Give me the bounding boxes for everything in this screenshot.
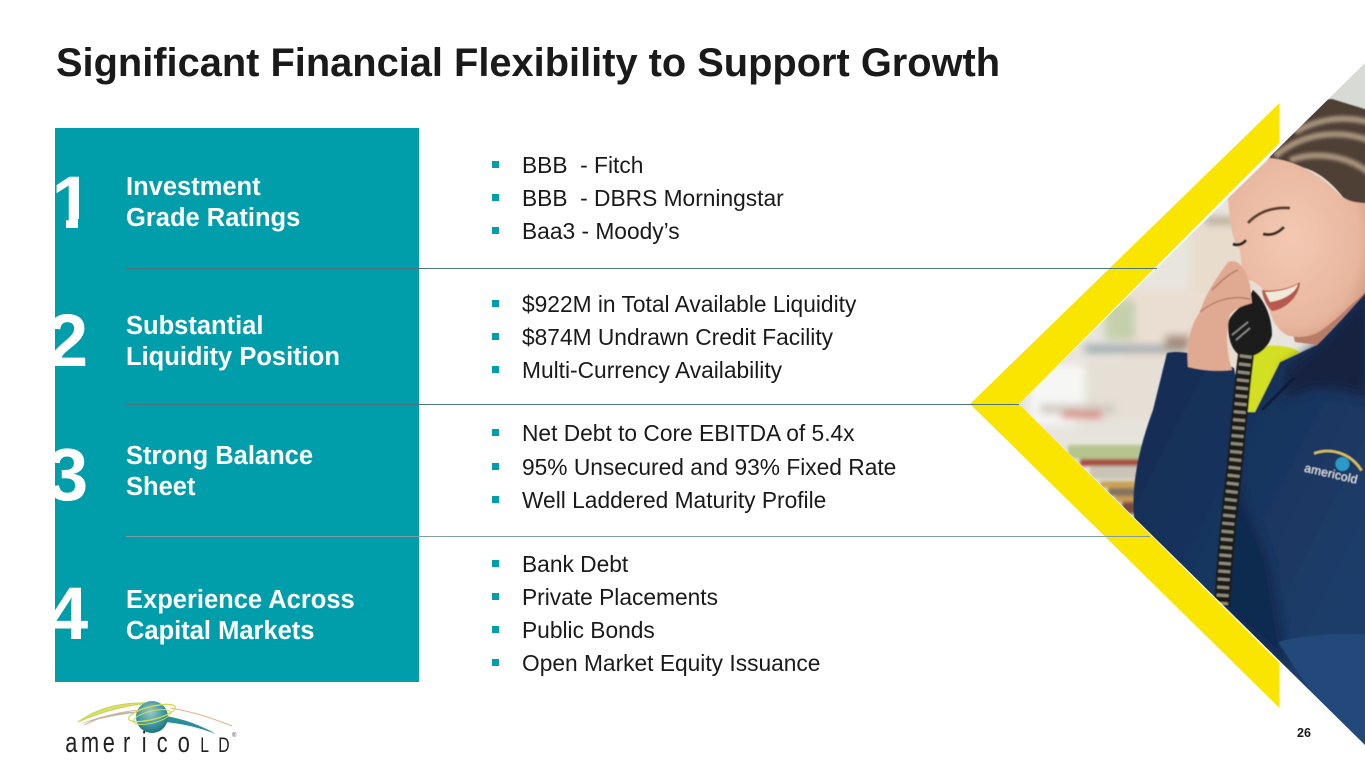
high-vis vest: [1243, 346, 1300, 412]
number 1: 1: [52, 161, 93, 244]
bullet list: capital markets: Public Bonds: [522, 617, 655, 643]
heading: experience across capital markets: Experience Across: [126, 586, 355, 614]
photo: woman on the telephone: [1010, 60, 1365, 750]
logo wordmark: americo: [65, 727, 190, 759]
heading: substantial liquidity position: Liquidity Position: [126, 342, 340, 370]
heading: strong balance sheet: Sheet: [126, 472, 195, 500]
number 2: 2: [47, 299, 88, 382]
heading: experience across capital markets: [126, 586, 355, 644]
hand: [1188, 261, 1252, 371]
heading: strong balance sheet: [126, 442, 313, 500]
bullet list: capital markets: Private Placements: [522, 584, 718, 610]
bullet list: balance sheet: Net Debt to Core EBITDA of 5.4x: [522, 420, 855, 446]
divider row 3: [126, 536, 1150, 537]
heading: investment grade ratings: Investment: [126, 173, 261, 201]
telephone handset: [1228, 290, 1272, 357]
hair: [1268, 98, 1365, 204]
logo globe: [136, 701, 168, 733]
title: Significant Financial Flexibility to Support Growth: [56, 41, 1000, 85]
bullet list: liquidity: $874M Undrawn Credit Facility: [522, 324, 833, 350]
eyebrows and closed eyes: [1248, 208, 1290, 223]
photo and yellow chevron: [970, 63, 1365, 745]
heading: investment grade ratings: [126, 173, 300, 232]
face: [1228, 158, 1365, 337]
bullet list: ratings: [492, 152, 784, 244]
bullet list: ratings: Baa3 - Moody’s: [522, 218, 680, 244]
logo: americold: LD: [200, 733, 230, 757]
bullet list: capital markets: Bank Debt: [522, 551, 628, 577]
bullet list: ratings: BBB - Fitch: [522, 152, 643, 178]
logo: americold: ®: [232, 732, 237, 739]
panel: teal column: [55, 128, 419, 682]
page number: 26: [1297, 726, 1311, 740]
number 4: 4: [47, 572, 88, 655]
coiled phone cord: [1222, 355, 1246, 606]
jacket: [1132, 292, 1365, 695]
jacket embroidered logo: [1304, 448, 1364, 484]
icon: yellow chevron: [970, 103, 1280, 708]
divider row 2: [126, 404, 1019, 405]
logo swooshes: [78, 703, 232, 734]
bullet list: ratings: BBB - DBRS Morningstar: [522, 185, 784, 211]
divider row 1: [126, 268, 1157, 269]
jacket embroidered logo: americold: [1303, 461, 1359, 487]
heading: substantial liquidity position: Substantial: [126, 312, 263, 340]
smile: [1262, 282, 1300, 311]
heading: strong balance sheet: Strong Balance: [126, 442, 313, 470]
bullet list: balance sheet: [492, 420, 896, 513]
number 3: 3: [47, 433, 88, 516]
bullet list: liquidity: Multi-Currency Availability: [522, 357, 782, 383]
heading: investment grade ratings: Grade Ratings: [126, 204, 300, 232]
bullet list: balance sheet: Well Laddered Maturity Profile: [522, 487, 826, 513]
bullet list: capital markets: Open Market Equity Issuance: [522, 650, 820, 676]
bullet list: balance sheet: 95% Unsecured and 93% Fixed Rate: [522, 454, 896, 480]
heading: experience across capital markets: Capital Markets: [126, 616, 314, 644]
bullet list: capital markets: [492, 551, 820, 676]
logo: americold: [65, 701, 237, 759]
heading: substantial liquidity position: [126, 312, 340, 370]
neck: [1293, 292, 1365, 346]
bullet list: liquidity: $922M in Total Available Liquidity: [522, 291, 856, 317]
bullet list: liquidity: [492, 291, 856, 383]
